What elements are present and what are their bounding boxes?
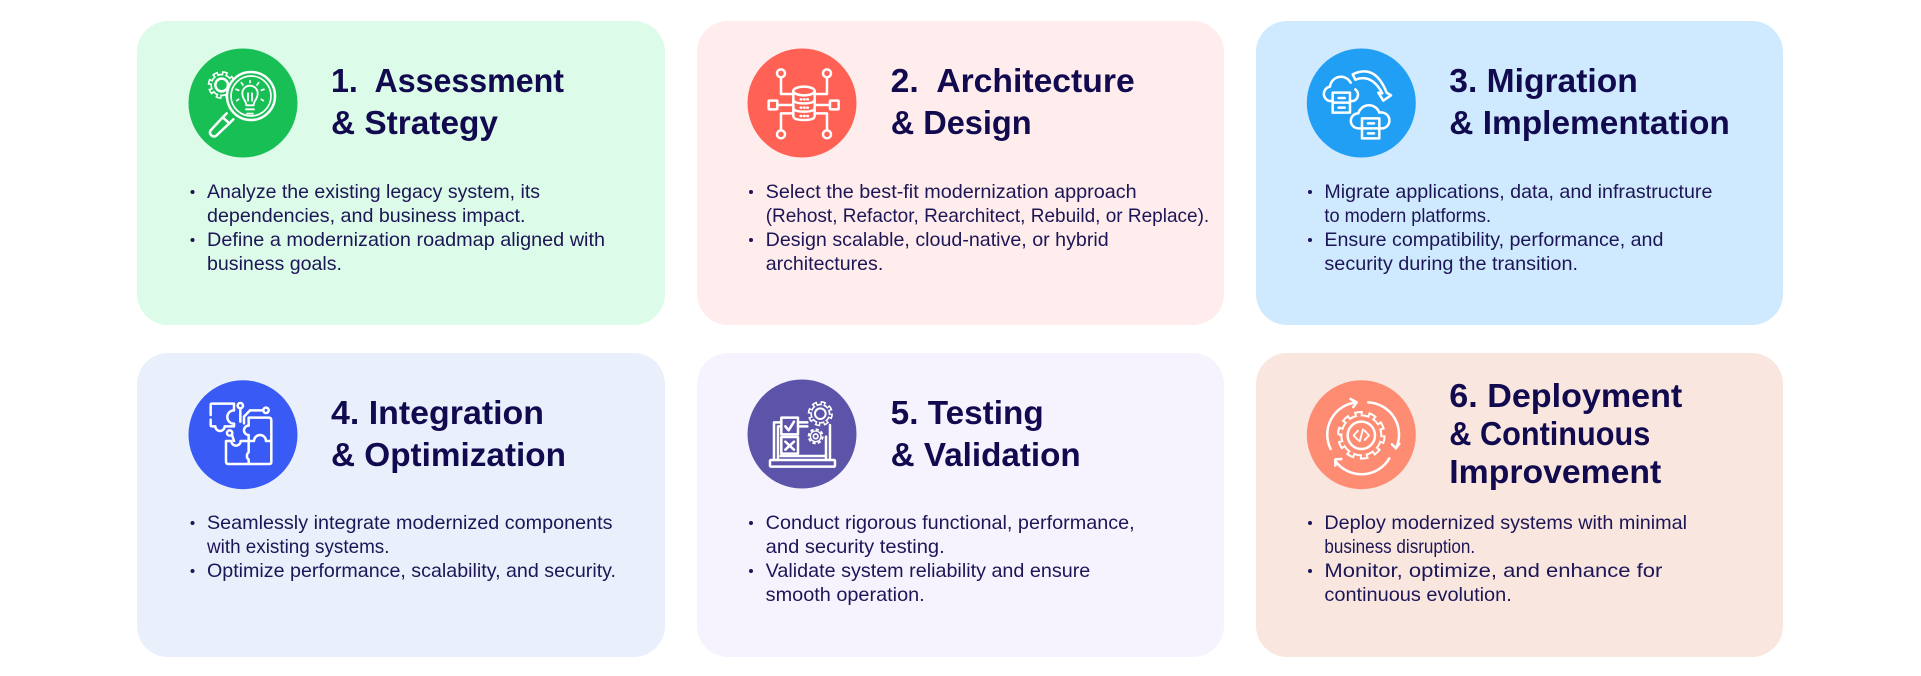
card background: peach xyxy=(1256,353,1783,657)
heading: & Continuous xyxy=(1449,415,1650,452)
bullet list: architectures. xyxy=(766,253,883,275)
heading: & Optimization xyxy=(331,436,566,473)
bullet list: Conduct rigorous functional, performance, xyxy=(766,512,1135,534)
panel: 3 migration and implementation xyxy=(1256,21,1783,325)
heading: Improvement xyxy=(1449,453,1661,490)
bullet list: dependencies, and business impact. xyxy=(207,205,526,227)
panel: 2 architecture and design xyxy=(697,21,1224,325)
panel: 5 testing and validation xyxy=(697,353,1224,657)
bullet list: Analyze the existing legacy system, its xyxy=(207,181,540,203)
bullet list: and security testing. xyxy=(766,536,945,558)
panel: 6 deployment and continuous improvement xyxy=(1256,353,1783,657)
bullet list: smooth operation. xyxy=(766,584,925,606)
bullet list: Migrate applications, data, and infrastructure xyxy=(1324,181,1712,203)
heading xyxy=(1449,62,1730,141)
icon: puzzle pieces xyxy=(188,380,298,489)
bullet list xyxy=(1308,181,1712,275)
bullet list: continuous evolution. xyxy=(1324,584,1512,606)
heading: & Design xyxy=(891,104,1032,141)
bullet list: (Rehost, Refactor, Rearchitect, Rebuild, or Replace). xyxy=(766,205,1209,227)
bullet list xyxy=(749,512,1135,606)
card background: lavender xyxy=(697,353,1224,657)
heading: & Validation xyxy=(891,436,1081,473)
heading xyxy=(891,394,1081,473)
icon: laptop with checklist and gears xyxy=(748,380,856,488)
bullet list: to modern platforms. xyxy=(1324,205,1491,227)
heading: 3. Migration xyxy=(1449,62,1638,99)
bullet list xyxy=(190,181,605,275)
bullet list xyxy=(1308,512,1687,606)
bullet list: security during the transition. xyxy=(1324,253,1578,275)
bullet list: Define a modernization roadmap aligned with xyxy=(207,229,605,251)
icon: cloud to cloud migration xyxy=(1307,48,1416,158)
heading: & Implementation xyxy=(1449,104,1730,141)
heading xyxy=(331,62,564,141)
icon: database with connected nodes xyxy=(748,48,856,158)
icon: code gear with cycle arrows xyxy=(1307,380,1416,489)
heading: 6. Deployment xyxy=(1449,377,1682,414)
bullet list: Validate system reliability and ensure xyxy=(766,560,1090,582)
heading xyxy=(331,394,566,473)
card background: green xyxy=(137,21,665,325)
card background: blue xyxy=(1256,21,1783,325)
heading xyxy=(891,62,1135,141)
card background: indigo xyxy=(137,353,665,657)
panel: 4 integration and optimization xyxy=(137,353,665,657)
bullet list: Monitor, optimize, and enhance for xyxy=(1324,560,1663,582)
card background: pink xyxy=(697,21,1224,325)
heading: 2. Architecture xyxy=(891,62,1135,99)
bullet list: with existing systems. xyxy=(206,536,390,558)
bullet list: Select the best-fit modernization approach xyxy=(766,181,1137,203)
bullet list: Ensure compatibility, performance, and xyxy=(1324,229,1663,251)
heading: 4. Integration xyxy=(331,394,544,431)
bullet list xyxy=(190,512,616,582)
bullet list: Design scalable, cloud-native, or hybrid xyxy=(766,229,1109,251)
bullet list: Seamlessly integrate modernized components xyxy=(207,512,613,534)
heading: 1. Assessment xyxy=(331,62,564,99)
heading: & Strategy xyxy=(331,104,499,141)
panel: 1 assessment and strategy xyxy=(137,21,665,325)
bullet list: Optimize performance, scalability, and security. xyxy=(207,560,616,582)
bullet list xyxy=(749,181,1209,275)
heading: 5. Testing xyxy=(891,394,1044,431)
heading xyxy=(1449,377,1682,490)
bullet list: business disruption. xyxy=(1324,536,1475,558)
icon: magnifier with gear and light bulb xyxy=(188,48,298,158)
bullet list: Deploy modernized systems with minimal xyxy=(1324,512,1687,534)
bullet list: business goals. xyxy=(207,253,342,275)
